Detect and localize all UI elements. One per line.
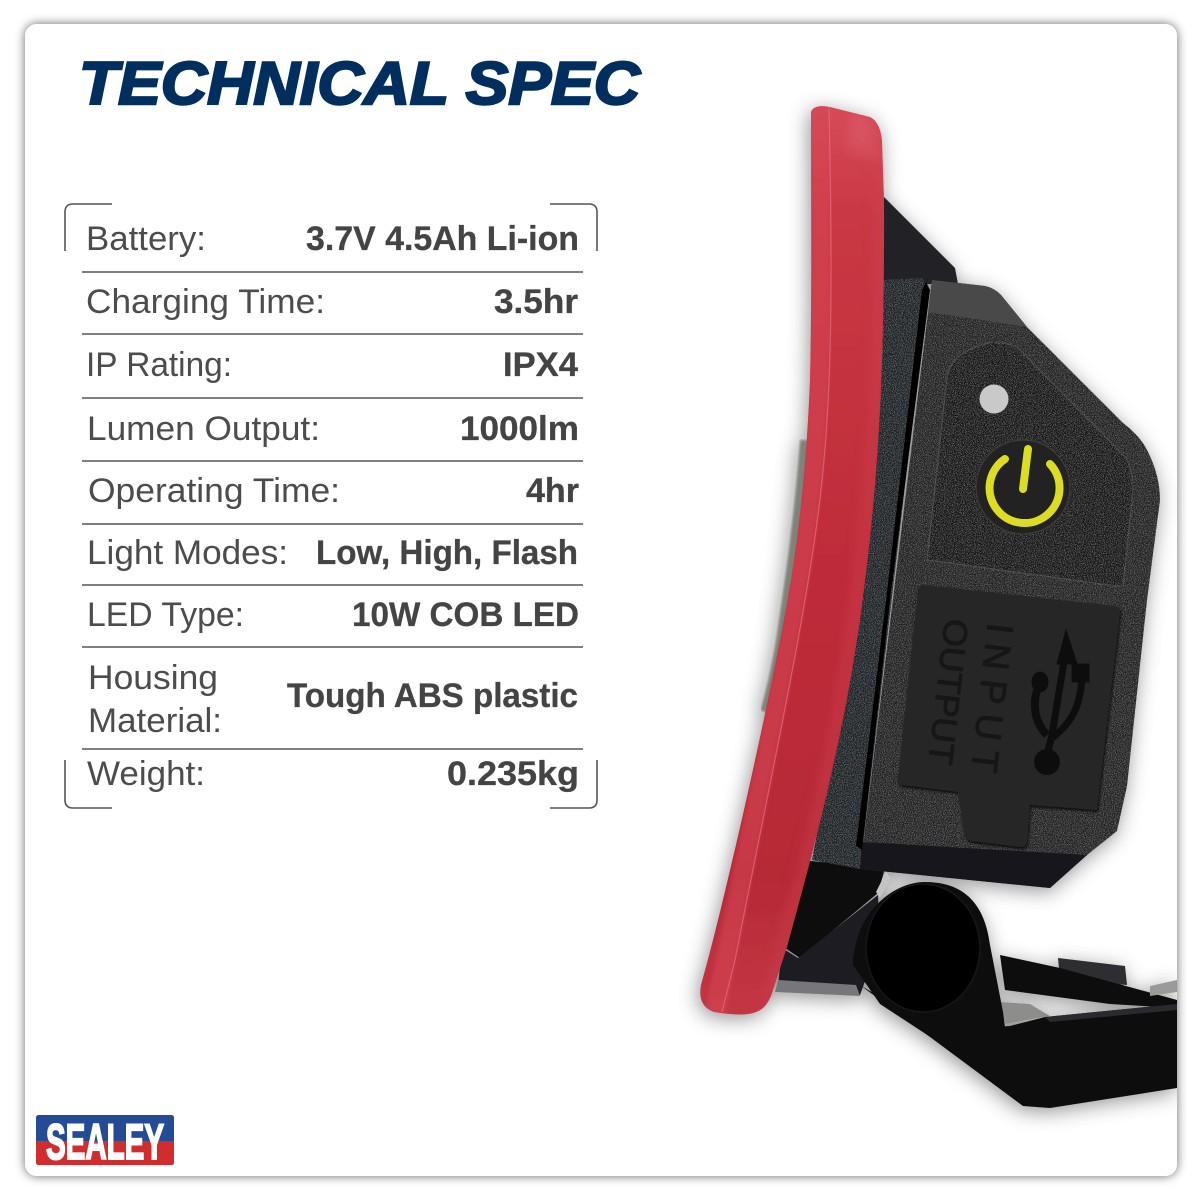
- row: lumen output: [87, 410, 579, 448]
- row: weight: Weight:: [87, 755, 205, 793]
- row: weight: [87, 755, 579, 793]
- row: housing material: [88, 659, 578, 740]
- row: LED type: 10W COB LED: [352, 596, 579, 634]
- Sealey logo: [36, 1114, 174, 1170]
- row: LED type: [87, 596, 579, 634]
- row: operating time: [88, 472, 579, 510]
- product photo: work light side view: [700, 100, 1177, 1108]
- housing gap: [856, 282, 930, 850]
- foot top highlight: [1045, 1004, 1177, 1022]
- rear bracket: [775, 860, 890, 996]
- row: lumen output: 1000lm: [460, 410, 579, 448]
- row: charging time: Charging Time:: [86, 283, 325, 321]
- row: LED type: LED Type:: [87, 596, 244, 634]
- grey lens sliver: [765, 440, 805, 712]
- embossed OUTPUT label: OUTPUT: [921, 617, 975, 766]
- row: IP rating: IP Rating:: [86, 346, 232, 384]
- row: battery: 3.7V 4.5Ah Li-ion: [306, 220, 579, 258]
- table corner brackets: [65, 204, 597, 808]
- rim highlight bands: [715, 100, 821, 1015]
- indicator LED: [980, 384, 1008, 414]
- embossed INPUT label: INPUT: [963, 621, 1021, 775]
- power button: [976, 440, 1070, 534]
- row: lumen output: Lumen Output:: [87, 410, 320, 448]
- row: battery: Battery:: [86, 220, 206, 258]
- main housing body: [860, 280, 1160, 888]
- row: battery: [86, 220, 579, 258]
- front bezel strip: [812, 278, 928, 869]
- row: IP rating: [86, 346, 578, 384]
- USB symbol: [1032, 630, 1089, 774]
- Sealey logo: SEALEY: [46, 1114, 164, 1170]
- row: light modes: Low, High, Flash: [316, 534, 578, 572]
- row: housing material: Housing: [88, 659, 218, 697]
- hinge knob: [853, 882, 1005, 1040]
- row: weight: 0.235kg: [447, 755, 579, 793]
- back housing wedge: [880, 197, 958, 284]
- bottom bevel: [860, 842, 1087, 888]
- top bevel: [928, 280, 1027, 327]
- lower foot: [860, 985, 1177, 1108]
- specification table: [65, 204, 597, 808]
- row: operating time: 4hr: [526, 472, 579, 510]
- row: housing material: Tough ABS plastic: [287, 677, 578, 715]
- row: housing material: Material:: [88, 702, 222, 740]
- control panel recess: [927, 342, 1133, 587]
- upper stand arm: [1000, 955, 1177, 1024]
- row: charging time: [86, 283, 578, 321]
- red lens rim: [700, 100, 884, 1015]
- row: light modes: Light Modes:: [87, 534, 288, 572]
- USB port flap: [898, 585, 1120, 847]
- row: operating time: Operating Time:: [88, 472, 340, 510]
- row: light modes: [87, 534, 578, 572]
- row: IP rating: IPX4: [503, 346, 578, 384]
- row: charging time: 3.5hr: [494, 283, 578, 321]
- title: TECHNICAL SPEC: [79, 50, 642, 117]
